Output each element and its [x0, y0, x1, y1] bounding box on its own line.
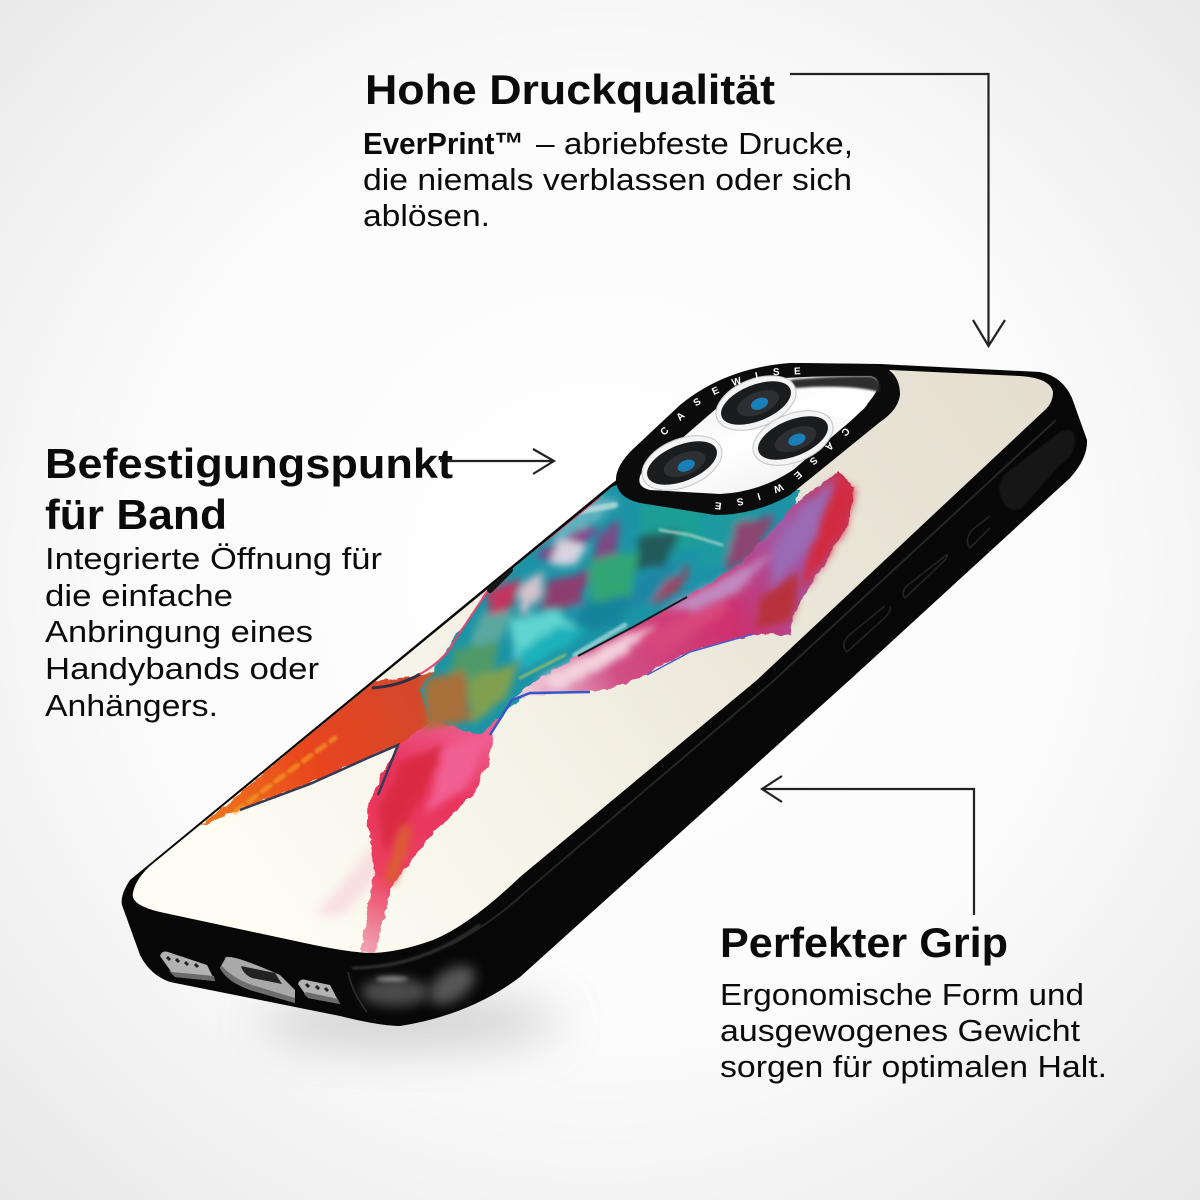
phone shadow	[260, 998, 560, 1046]
text block: grip	[720, 919, 1107, 1084]
arrow: strap point	[440, 449, 554, 474]
camera module	[616, 363, 900, 515]
lens top	[708, 365, 804, 441]
text block: grip: sorgen für optimalen Halt.	[720, 1049, 1107, 1084]
heading	[45, 440, 453, 538]
gloss streak	[376, 976, 408, 982]
bottom ports	[160, 952, 340, 1004]
charging port opening	[241, 966, 282, 984]
lens right	[745, 400, 841, 476]
body base	[420, 484, 800, 735]
side buttons	[844, 516, 990, 652]
rim lettering bottom: CASEWISE	[714, 428, 850, 510]
left speaker	[160, 952, 215, 981]
tail undercut	[240, 745, 398, 810]
camera glass	[639, 376, 878, 494]
arrow: grip	[762, 776, 974, 915]
case corner highlight	[348, 925, 482, 1012]
heading: Hohe Druckqualität	[365, 66, 775, 113]
text block: grip: Ergonomische Form und	[720, 977, 1084, 1012]
text block: print quality: ablösen.	[363, 198, 490, 233]
fish top edge	[372, 674, 420, 688]
right speaker	[298, 980, 340, 1004]
text block: strap point: Anhängers.	[45, 688, 218, 723]
blue contour	[490, 692, 590, 735]
phone case	[122, 363, 1087, 1026]
rim lettering top: CASEWISE	[660, 367, 800, 434]
text block: print quality: die niemals verblassen oder sich	[363, 162, 852, 197]
camera ring	[616, 363, 900, 515]
lens left	[634, 425, 730, 501]
inner shadow	[790, 376, 880, 392]
lower tail fin	[360, 714, 504, 953]
rim highlight	[450, 420, 1056, 945]
pectoral fin	[512, 472, 855, 700]
charging port	[220, 957, 295, 1003]
text block: strap point: Anbringung eines	[45, 614, 313, 649]
text block: strap point: Handybands oder	[45, 651, 319, 686]
text block: strap point: Integrierte Öffnung für	[45, 541, 382, 576]
pastel highlights	[235, 505, 722, 812]
body colour patches	[425, 495, 775, 730]
text block: strap point	[45, 440, 453, 723]
paper	[132, 370, 1053, 953]
mermaid tail artwork	[200, 472, 855, 952]
case body	[122, 363, 1087, 1026]
text block: print quality: EverPrint™	[363, 126, 524, 161]
pink wash drip	[318, 845, 376, 918]
text block: print quality: – abriebfeste Drucke,	[536, 126, 853, 161]
arrow: print quality	[790, 74, 1005, 346]
strap attachment point	[999, 430, 1075, 510]
back print	[132, 370, 1053, 953]
text block: strap point: die einfache	[45, 578, 233, 613]
flash	[827, 387, 873, 423]
left tail fin	[200, 670, 435, 826]
dark pastel outline	[578, 597, 687, 656]
heading: für Band	[45, 491, 227, 538]
text block: grip: ausgewogenes Gewicht	[720, 1013, 1080, 1048]
heading: Perfekter Grip	[720, 919, 1008, 966]
heading: Befestigungspunkt	[45, 440, 453, 487]
text block: print quality	[363, 66, 853, 233]
